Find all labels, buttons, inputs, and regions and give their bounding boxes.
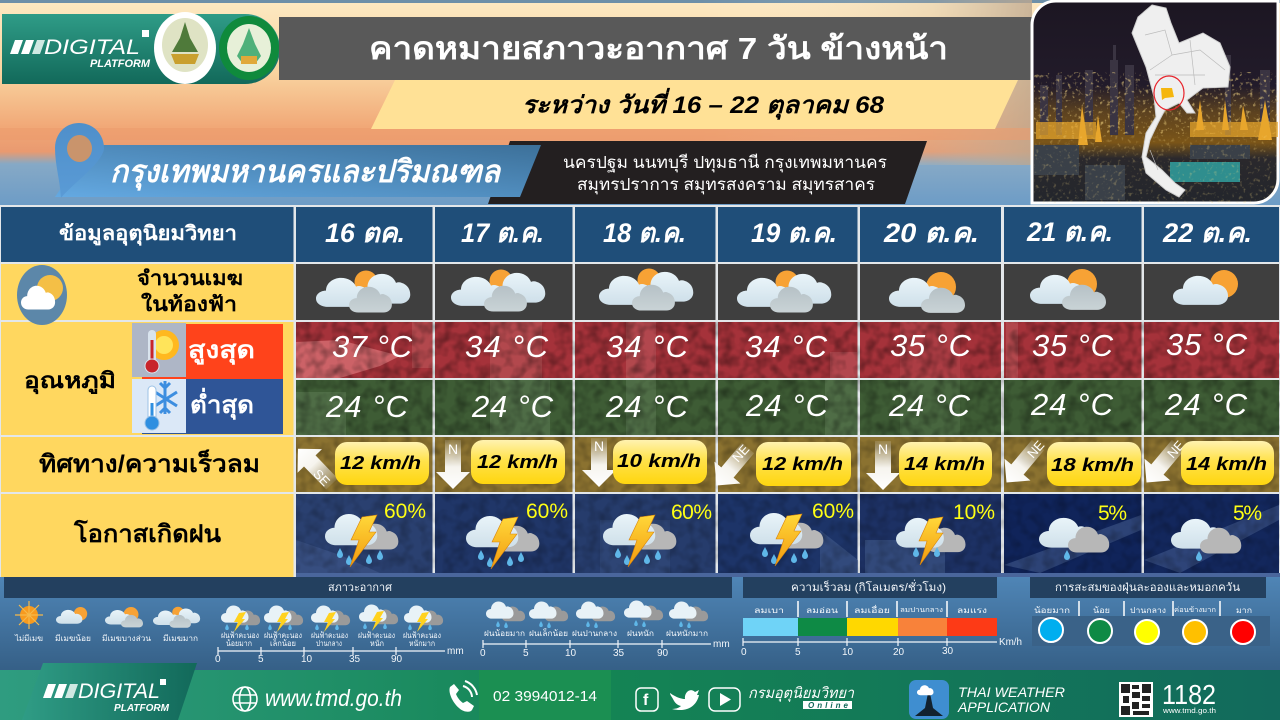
wind direction arrows: N (878, 441, 888, 457)
sky cover keys: มีเมฆมาก (163, 634, 198, 643)
wind speed badges: 14 km/h (1186, 454, 1267, 474)
emblem: meteorological department (219, 16, 279, 80)
wind row (286, 434, 1280, 496)
header row: ข้อมูลอุตุนิยมวิทยา (59, 222, 237, 247)
rain keys: 90 (657, 648, 669, 659)
department online: กรมอุตุนิยมวิทยา (748, 685, 855, 702)
thunderstorm keys: ฝนฟ้าคะนอง (358, 631, 395, 640)
rain keys: ฝนหนัก (627, 629, 654, 638)
left label column (1, 264, 294, 577)
rain keys: 10 (565, 648, 577, 659)
wind speed badges: 10 km/h (617, 451, 701, 471)
wind direction arrows: SE (310, 466, 333, 489)
rain chance row: 5% (1233, 502, 1262, 525)
app icon (909, 680, 949, 719)
department online: Online (808, 701, 849, 710)
legend: dust and haze: น้อย (1093, 606, 1110, 615)
title band: คาดหมายสภาวะอากาศ 7 วัน ข้างหน้า (369, 31, 948, 66)
legend: dust and haze: ค่อนข้างมาก (1174, 606, 1216, 614)
rain chance row: 5% (1098, 502, 1127, 525)
thunderstorm keys (215, 605, 464, 665)
legend: weather conditions: สภาวะอากาศ (328, 582, 392, 594)
maximum temperature row: 34 °C (606, 329, 689, 364)
sky cover keys: มีเมฆบางส่วน (102, 634, 152, 643)
rain chance row: 60% (526, 500, 568, 523)
header row (1, 207, 1279, 262)
wind direction arrows: NE (1164, 437, 1188, 461)
wind direction arrows: N (594, 438, 604, 454)
legend: wind speed: 5 (795, 647, 801, 658)
wind direction arrows: NE (1024, 437, 1048, 461)
thunderstorm keys: น้อยมาก (226, 639, 252, 648)
legend: weather conditions (4, 577, 732, 665)
legend: wind speed: ลมปานกลาง (900, 607, 943, 614)
icon: globe (233, 687, 257, 711)
thunderstorm keys: 90 (391, 654, 403, 665)
legend: wind speed: 30 (942, 646, 954, 657)
legend: dust and haze (1030, 577, 1270, 646)
wind direction arrows (286, 434, 1191, 496)
wind speed badges: 12 km/h (762, 454, 843, 474)
phone number (479, 670, 611, 720)
thunderstorm keys: 0 (215, 654, 221, 665)
thunderstorm keys: 35 (349, 654, 361, 665)
maximum temperature row: 35 °C (1166, 327, 1248, 362)
left label column: โอกาสเกิดฝน (73, 519, 222, 548)
minimum temperature row: 24 °C (745, 388, 829, 423)
icon: facebook: f (643, 692, 649, 709)
app name (957, 684, 1065, 715)
header row: 18 ต.ค. (603, 218, 686, 248)
header row: 20 ต.ค. (883, 218, 979, 248)
thunderstorm keys: ปานกลาง (316, 639, 342, 648)
digital platform logo: PLATFORM (90, 58, 151, 70)
legend strip (0, 577, 1280, 672)
minimum temperature row: 24 °C (1164, 387, 1248, 422)
province list panel (488, 141, 927, 204)
forecast table (0, 205, 1280, 577)
left label column: อุณหภูมิ (24, 368, 116, 395)
region banner: กรุงเทพมหานครและปริมณฑล (110, 154, 502, 191)
app name: APPLICATION (957, 699, 1051, 715)
date range ribbon: ระหว่าง วันที่ 16 – 22 ตุลาคม 68 (522, 87, 885, 120)
emblem: ministry (154, 12, 216, 84)
legend: wind speed: ลมเอื่อย (854, 604, 890, 615)
sky cover keys: ไม่มีเมฆ (14, 634, 43, 643)
website: www.tmd.go.th (265, 685, 402, 711)
left label column: จำนวนเมฆ (137, 268, 243, 290)
maximum temperature row: 35 °C (890, 328, 972, 363)
thunderstorm keys: ฝนฟ้าคะนอง (403, 631, 441, 640)
minimum temperature row: 24 °C (325, 389, 409, 424)
wind speed badges: 12 km/h (477, 452, 558, 472)
sky cover keys: มีเมฆน้อย (55, 634, 91, 643)
max temperature tag (132, 323, 283, 379)
thunderstorm keys: 10 (301, 654, 313, 665)
hotline 1182: 1182 (1162, 679, 1216, 710)
province list panel: นครปฐม นนทบุรี ปทุมธานี กรุงเทพมหานคร (563, 153, 887, 173)
wind direction arrows: NE (729, 441, 753, 465)
region banner (55, 123, 541, 198)
minimum temperature row: 24 °C (605, 389, 689, 424)
sky cover row (296, 264, 1279, 320)
minimum temperature row: 24 °C (471, 389, 554, 424)
rain chance row: 60% (671, 501, 712, 524)
legend: wind speed (741, 577, 1022, 658)
thunderstorm keys: ฝนฟ้าคะนอง (311, 631, 348, 640)
wind speed badges: 14 km/h (904, 454, 985, 474)
min temperature tag (132, 379, 283, 434)
header row: 16 ตค. (325, 218, 405, 248)
legend: dust and haze: น้อยมาก (1034, 606, 1070, 615)
header row: 19 ต.ค. (751, 218, 837, 248)
icon: youtube (709, 688, 740, 711)
thunderstorm keys: 5 (258, 654, 264, 665)
minimum temperature row: 24 °C (1030, 387, 1114, 422)
header row: 21 ต.ค. (1026, 217, 1113, 247)
thunderstorm keys: ฝนฟ้าคะนอง (264, 631, 302, 640)
rain keys: ฝนหนักมาก (666, 629, 708, 638)
rain keys: 0 (480, 648, 486, 659)
footer logo: DIGITAL (78, 680, 160, 703)
thunderstorm keys: หนัก (370, 639, 384, 648)
rain keys: 35 (613, 648, 625, 659)
rain keys: ฝนปานกลาง (572, 629, 617, 638)
header background (0, 0, 1280, 205)
legend: wind speed: ลมเบา (754, 606, 784, 615)
icon: phone (449, 681, 477, 712)
QR code (1119, 682, 1153, 717)
rain keys: ฝนน้อยมาก (484, 629, 525, 638)
app name: THAI WEATHER (958, 684, 1065, 700)
legend: wind speed: ลมแรง (957, 606, 987, 615)
header row: 22 ต.ค. (1162, 218, 1252, 248)
left label column: ในท้องฟ้า (141, 292, 237, 316)
footer (0, 663, 1280, 720)
legend: dust and haze: การสะสมของฝุ่นละอองและหมอกควัน (1055, 582, 1240, 594)
maximum temperature row: 34 °C (745, 329, 828, 364)
icon: twitter (670, 690, 699, 710)
maximum temperature row: 34 °C (465, 329, 549, 364)
legend: dust and haze: ปานกลาง (1130, 606, 1166, 615)
rain keys: ฝนเล็กน้อย (529, 628, 568, 638)
legend: wind speed: ความเร็วลม (กิโลเมตร/ชั่วโมง) (791, 579, 946, 594)
thunderstorm keys: mm (447, 646, 464, 657)
sky cover keys (14, 601, 200, 643)
maximum temperature row (296, 322, 1280, 378)
wind speed badges: 12 km/h (340, 453, 421, 473)
hotline 1182: www.tmd.go.th (1162, 708, 1216, 715)
legend: wind speed: 10 (842, 647, 854, 658)
minimum temperature row: 24 °C (888, 388, 971, 423)
thunderstorm keys: หนักมาก (409, 639, 435, 648)
minimum temperature row (296, 380, 1280, 435)
header row: 17 ต.ค. (461, 218, 544, 248)
rain chance row: 60% (384, 500, 426, 523)
logo panel (2, 12, 280, 84)
footer logo: PLATFORM (114, 703, 170, 714)
min temperature tag: ต่ำสุด (190, 387, 254, 421)
icon: facebook (636, 688, 658, 711)
icon: map pin (55, 123, 104, 198)
rain keys: 5 (523, 648, 529, 659)
legend: wind speed: 0 (741, 647, 747, 658)
thunderstorm keys: ฝนฟ้าคะนอง (221, 631, 259, 640)
icon: sky cloud badge (17, 265, 67, 325)
digital platform logo: DIGITAL (44, 36, 140, 59)
department online (748, 685, 855, 710)
legend: dust and haze: มาก (1236, 606, 1252, 615)
max temperature tag: สูงสุด (188, 337, 255, 366)
wind speed badges: 18 km/h (1051, 455, 1134, 475)
province list panel: สมุทรปราการ สมุทรสงคราม สมุทรสาคร (577, 175, 875, 195)
footer logo (22, 663, 197, 720)
rain keys (480, 601, 730, 659)
wind direction arrows: N (448, 441, 458, 457)
rain chance row: 10% (953, 501, 995, 524)
rain chance row: 60% (812, 500, 854, 523)
wind speed badges (335, 440, 1274, 486)
legend: wind speed: Km/h (999, 637, 1022, 648)
legend: wind speed: ลมอ่อน (806, 606, 839, 615)
rain chance row (296, 494, 1280, 577)
rain keys: mm (713, 639, 730, 650)
thunderstorm keys: เล็กน้อย (270, 638, 296, 648)
maximum temperature row: 35 °C (1032, 328, 1114, 363)
Thailand map (1132, 5, 1230, 197)
maximum temperature row: 37 °C (332, 329, 413, 364)
phone number: 02 3994012-14 (493, 688, 597, 705)
digital platform logo (10, 30, 151, 70)
title band (279, 17, 1032, 80)
left label column: ทิศทาง/ความเร็วลม (39, 449, 260, 478)
locator map over night city photo (1032, 1, 1278, 203)
date range ribbon (371, 80, 1018, 129)
legend: wind speed: 20 (893, 647, 905, 658)
